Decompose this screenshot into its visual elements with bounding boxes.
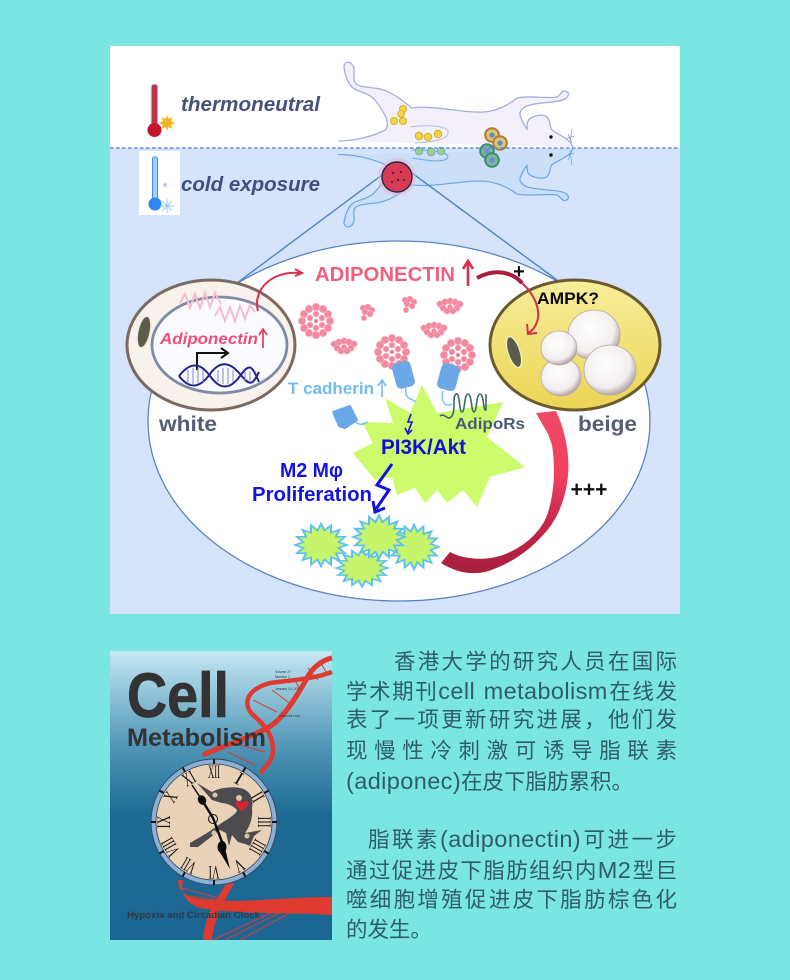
label: thermoneutral: thermoneutral	[181, 94, 320, 116]
arrow: adiponectin secretion up	[463, 261, 473, 286]
arrow: adiponectin to beige cell	[477, 272, 538, 334]
arrow: T cadherin up	[378, 380, 386, 397]
clock numerals: XI	[179, 767, 200, 791]
DNA back strands	[203, 658, 332, 773]
adiponectin oligomers	[298, 296, 476, 373]
text block: research summary: 学术期刊cell metabolism在线发	[346, 678, 677, 704]
icon: cold thermometer	[139, 151, 180, 215]
lower DNA	[178, 880, 332, 940]
issue text: Volume 27	[275, 670, 291, 674]
green activation star	[353, 385, 525, 507]
issue text: www.cell.com	[279, 714, 300, 718]
small lightning arrow	[405, 414, 412, 434]
label: T cadherin: T cadherin	[288, 379, 374, 398]
clock numerals: XII	[208, 762, 220, 783]
M2 macrophage cluster	[295, 515, 439, 587]
cell: beige adipocyte	[490, 280, 660, 410]
arrow: secretion from white cell	[257, 269, 302, 311]
issue text	[275, 670, 301, 718]
label: ADIPONECTIN: ADIPONECTIN	[315, 264, 455, 286]
label: plus plus plus: +++	[570, 477, 608, 502]
cover title: Metabolism: Metabolism	[127, 724, 266, 752]
label: Adiponectin up: Adiponectin	[159, 331, 258, 348]
icon: warm thermometer	[148, 84, 175, 137]
AdipoR receptor	[440, 394, 486, 418]
clock numerals	[154, 762, 274, 882]
label: cold exposure: cold exposure	[181, 174, 320, 196]
text block: research summary: 香港大学的研究人员在国际	[394, 650, 677, 674]
text block: research summary: 噬细胞增殖促进皮下脂肪棕色化	[346, 888, 677, 912]
cover title: Cell: Cell	[127, 661, 229, 731]
clock numerals: VI	[208, 861, 220, 882]
connector lines to zoom ellipse	[237, 172, 557, 283]
clock numerals: VII	[178, 852, 201, 877]
mouse: thermoneutral	[338, 62, 574, 150]
text block: research summary: 的发生。	[346, 918, 432, 942]
issue text: Number 1	[275, 675, 290, 679]
label: M2 macrophage: M2 Mφ	[280, 460, 343, 482]
clock numerals: IIII	[244, 835, 269, 858]
mRNA waves	[180, 293, 255, 321]
rat silhouette	[190, 783, 262, 847]
promoter arrow	[197, 348, 228, 370]
rat heart	[236, 801, 248, 811]
label: beige: beige	[578, 413, 637, 436]
text block: research summary: (adiponec)在皮下脂肪累积。	[346, 768, 633, 794]
clock numerals: VIII	[158, 834, 185, 860]
text block: research summary: 通过促进皮下脂肪组织内M2型巨	[346, 857, 677, 883]
issue text: January 10, 2017	[275, 687, 301, 691]
label: plus: +	[513, 261, 525, 283]
cover subtitle: Hypoxia and Circadian Clock	[127, 910, 261, 921]
label: AdipoRs: AdipoRs	[455, 416, 525, 433]
T-cadherin receptors	[333, 360, 461, 428]
arrow: adiponectin up	[259, 329, 267, 348]
clock numerals: II	[246, 789, 268, 806]
label: PI3K/Akt: PI3K/Akt	[381, 436, 466, 459]
cell: white adipocyte	[127, 280, 295, 410]
text block: research summary: 脂联素(adiponectin)可进一步	[368, 826, 677, 852]
text block: research summary: 现慢性冷刺激可诱导脂联素	[346, 739, 677, 763]
clock numerals: IX	[154, 815, 175, 828]
clock hands	[192, 785, 230, 869]
journal cover	[110, 651, 332, 940]
clock numerals: V	[229, 854, 248, 876]
clock	[151, 759, 277, 885]
DNA	[179, 364, 259, 386]
clock ticks	[151, 759, 277, 885]
lightning arrow to macrophages	[373, 464, 392, 512]
text block: research summary: 表了一项更新研究进展，他们发	[346, 708, 677, 732]
clock numerals: I	[231, 768, 247, 790]
clock numerals: III	[253, 816, 274, 828]
label: AMPK?: AMPK?	[537, 290, 599, 308]
mouse: cold exposure	[338, 144, 574, 227]
zoom ellipse	[148, 241, 650, 601]
rat joints	[212, 792, 250, 838]
clock numerals: X	[160, 788, 183, 806]
label: Proliferation: Proliferation	[252, 484, 372, 506]
label: white: white	[158, 413, 217, 436]
icon: red fat depot	[378, 158, 416, 196]
large curved red arrow	[441, 411, 568, 573]
panel: mechanism diagram	[110, 46, 680, 614]
